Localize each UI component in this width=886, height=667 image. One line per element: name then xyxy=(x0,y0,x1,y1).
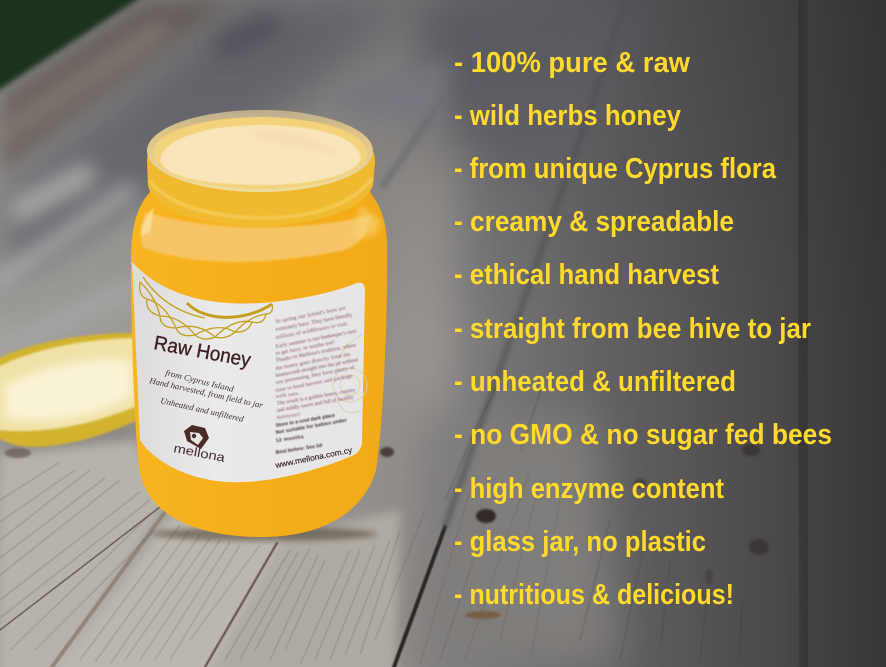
ghost lace, back panel xyxy=(333,335,367,413)
lid rim xyxy=(0,333,142,447)
lid inner xyxy=(0,338,140,431)
label back text: with care. xyxy=(275,391,300,400)
label back text: In spring our Island's bees are xyxy=(275,305,347,325)
label back text: and mildly sweet and full of healthy xyxy=(276,393,354,414)
jar label: Not suitable for babies under xyxy=(275,418,347,436)
item 10: - glass jar, no plastic xyxy=(454,526,706,558)
label back text: the honey goes directly from the xyxy=(275,350,352,372)
label back text: any processing, they have plenty of xyxy=(275,364,355,386)
green foliage corner xyxy=(0,0,152,96)
label back text: nutrients! xyxy=(276,412,301,421)
brand name: mellona xyxy=(172,441,226,465)
item 1: - 100% pure & raw xyxy=(454,47,690,79)
wood knots xyxy=(5,444,769,619)
mellona logo xyxy=(172,425,226,465)
jar shoulder highlight xyxy=(141,212,372,262)
neck thread highlight xyxy=(149,178,372,218)
label back text: The result is a golden honey, creamy xyxy=(276,387,356,407)
jar body xyxy=(131,190,387,537)
feature list xyxy=(454,47,832,611)
label title: Raw Honey xyxy=(152,332,252,372)
jar glass reflections xyxy=(141,207,154,236)
lower-left light planks xyxy=(0,440,400,667)
item 9: - high enzyme content xyxy=(454,473,724,505)
label paper xyxy=(132,262,365,482)
jar label: Store in a cool dark place xyxy=(275,413,336,429)
jar label xyxy=(132,262,367,482)
label back text: Early summer is our beekeeper's turn xyxy=(275,328,357,350)
item 3: - from unique Cyprus flora xyxy=(454,153,777,185)
creamy honey surface xyxy=(160,125,361,185)
label tagline xyxy=(148,367,265,424)
jar label: Best before: See lid xyxy=(275,443,323,456)
label tagline: from Cyprus Island xyxy=(165,367,236,394)
jar label: 12 months xyxy=(275,434,304,444)
label back text: millions of wildflowers to visit. xyxy=(275,320,349,341)
jar lid xyxy=(0,333,142,447)
contact shadow xyxy=(153,527,377,541)
label back text: time to hand harvest and package xyxy=(275,373,354,394)
label tagline: Hand harvested, from field to jar xyxy=(148,375,265,410)
item 11: - nutritious & delicious! xyxy=(454,579,734,611)
item 7: - unheated & unfiltered xyxy=(454,366,736,398)
glass rim xyxy=(147,110,373,192)
broad plank tones xyxy=(0,0,640,667)
item 4: - creamy & spreadable xyxy=(454,206,734,238)
surface tint xyxy=(245,130,340,155)
icon: hive house xyxy=(184,425,209,449)
label back text: honeycomb straight into the jar without xyxy=(275,357,359,379)
website: www.mellona.com.cy xyxy=(274,446,353,470)
item 6: - straight from bee hive to jar xyxy=(454,313,811,345)
label back text: to get busy, or maybe not! xyxy=(275,340,335,357)
label tagline: Unheated and unfiltered xyxy=(160,395,245,424)
item 2: - wild herbs honey xyxy=(454,100,681,132)
lid highlight xyxy=(5,359,134,421)
label lace ornament xyxy=(140,277,272,339)
wood grain streaks xyxy=(0,462,560,665)
honey jar xyxy=(131,110,387,541)
label back text: Thanks to Mellona's tradition, where xyxy=(275,342,357,364)
jar neck xyxy=(147,110,375,226)
pale streaks, upper left xyxy=(0,25,270,350)
label back text: extremely busy. They have literally xyxy=(275,312,353,333)
label back text xyxy=(275,305,359,421)
item 8: - no GMO & no sugar fed bees xyxy=(454,419,832,451)
item 5: - ethical hand harvest xyxy=(454,259,719,291)
